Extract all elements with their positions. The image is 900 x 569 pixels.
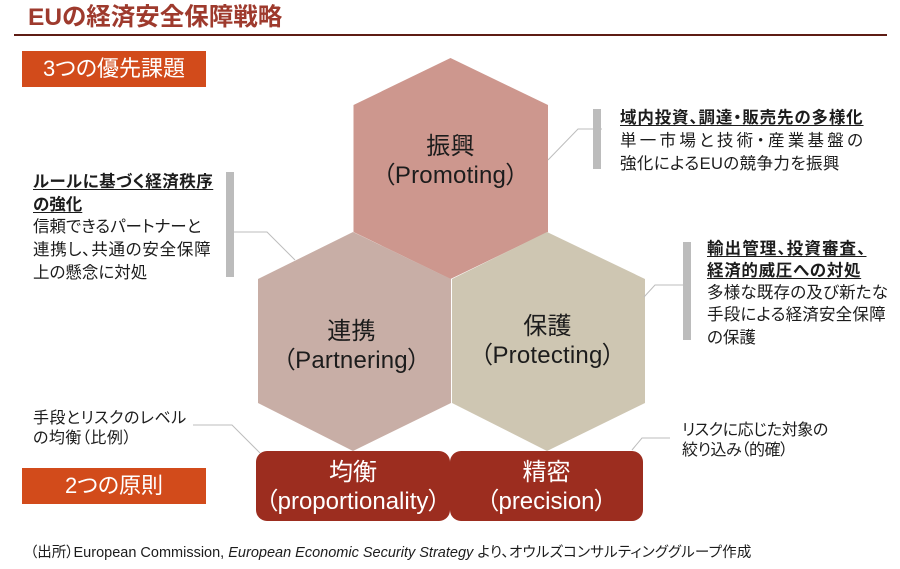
text block: proportionality note: 手段とリスクのレベル: [33, 410, 187, 427]
connector lines: [193, 129, 683, 453]
text block: protecting: 輸出管理、投資審査、: [707, 240, 866, 258]
text block: partnering: [33, 172, 214, 282]
heading: two principles: 2つの原則: [65, 473, 163, 498]
principle box: proportionality: 均衡: [329, 459, 377, 486]
text block: promoting: 単一市場と技術・産業基盤の: [620, 132, 863, 150]
text block: partnering: 上の懸念に対処: [33, 264, 147, 282]
hexagon label: partnering: 連携: [327, 318, 376, 345]
principle box: proportionality: [256, 451, 450, 521]
text block: protecting: 経済的威圧への対処: [707, 262, 861, 280]
text block: promoting: 域内投資、調達・販売先の多様化: [620, 109, 864, 127]
hexagon label: promoting: 振興: [426, 133, 475, 160]
principle box: proportionality: （proportionality）: [266, 488, 440, 515]
hexagon label: partnering: （Partnering）: [283, 346, 420, 374]
text block: precision note: 絞り込み（的確）: [682, 442, 788, 458]
accent bar: partnering: [226, 172, 234, 277]
text block: protecting: [707, 240, 888, 347]
text block: partnering: の強化: [33, 196, 82, 214]
hexagon: promoting: [354, 58, 548, 279]
hexagon label: partnering: [283, 318, 420, 374]
principle box: precision: 精密: [522, 459, 570, 486]
heading: two principles: [22, 468, 206, 504]
source note: （出所）European Commission, European Economic Security Strategy より、オウルズコンサルティンググループ作成: [30, 545, 752, 561]
accent bar: protecting: [683, 242, 691, 340]
text block: partnering: 信頼できるパートナーと: [33, 218, 201, 236]
text block: promoting: [620, 108, 864, 173]
text block: protecting: 手段による経済安全保障: [707, 306, 886, 324]
text block: protecting: の保護: [707, 329, 756, 347]
principle box: precision: （precision）: [486, 488, 607, 515]
hexagon label: protecting: （Protecting）: [480, 342, 615, 368]
hexagon label: promoting: [383, 133, 518, 188]
principle box: precision: [450, 451, 643, 521]
hexagon label: promoting: （Promoting）: [383, 162, 518, 188]
text block: precision note: [682, 421, 828, 458]
text block: promoting: 強化によるEUの競争力を振興: [620, 155, 840, 173]
text block: partnering: 連携し、共通の安全保障: [33, 241, 211, 259]
text block: protecting: 多様な既存の及び新たな: [707, 284, 888, 302]
hexagon: partnering: [258, 232, 451, 451]
accent bar: promoting: [593, 109, 601, 169]
text block: proportionality note: [33, 409, 187, 446]
hexagon label: protecting: 保護: [523, 313, 572, 340]
heading: three priorities: [22, 51, 206, 87]
title: EUの経済安全保障戦略: [28, 4, 282, 31]
heading: three priorities: 3つの優先課題: [43, 56, 185, 81]
hexagon: protecting: [452, 232, 645, 451]
hexagon label: protecting: [480, 313, 615, 368]
title rule: [14, 34, 887, 36]
text block: partnering: ルールに基づく経済秩序: [33, 173, 213, 191]
text block: precision note: リスクに応じた対象の: [682, 422, 828, 439]
text block: proportionality note: の均衡（比例）: [33, 430, 132, 446]
